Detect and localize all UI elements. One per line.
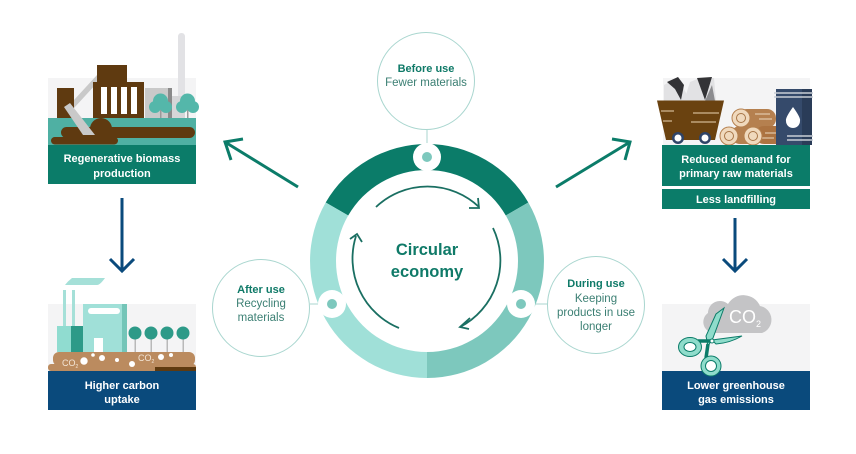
label: Higher carbon: [85, 380, 160, 392]
label: Less landfilling: [696, 194, 776, 206]
icon: scissors: [678, 308, 742, 376]
icon: chimney: [178, 33, 185, 118]
center title: economy: [391, 263, 464, 281]
callout: after use: Recycling: [236, 298, 286, 310]
label: production: [93, 168, 151, 180]
arrow: circular economy to biomass: [225, 139, 298, 187]
callout: before use: [378, 32, 474, 130]
icon: CO2 cloud: 2: [756, 319, 761, 329]
icon: trees: [149, 94, 199, 119]
icon: soil with carbon: 2: [152, 359, 154, 365]
panel: lower greenhouse gas emissions: [662, 295, 810, 410]
label: Regenerative biomass: [64, 153, 180, 165]
chart: circular economy ring: [310, 130, 548, 378]
panel: regenerative biomass production: [48, 33, 199, 184]
label: Reduced demand for: [681, 154, 791, 166]
callout: before use: Before use: [398, 63, 454, 75]
callout: after use: materials: [238, 312, 285, 324]
callout: during use: products in use: [557, 307, 635, 319]
callout: during use: During use: [567, 278, 625, 290]
callout: after use: [212, 260, 310, 356]
callout: during use: Keeping: [575, 293, 617, 305]
arrow: circular economy to raw materials: [556, 139, 630, 187]
icon: factory: [57, 278, 127, 352]
icon: soil with carbon: 2: [76, 364, 78, 370]
icon: soil with carbon: CO: [138, 353, 152, 363]
inner cycle arrows: [350, 187, 500, 329]
callout: during use: longer: [580, 321, 612, 333]
icon: CO2 cloud: [703, 295, 771, 333]
label: Lower greenhouse: [687, 380, 785, 392]
panel: higher carbon uptake: [48, 278, 196, 410]
segment: during use: [427, 202, 544, 378]
icon: mine cart with rocks: [657, 77, 724, 144]
icon: row of trees: [128, 326, 190, 352]
label: gas emissions: [698, 394, 774, 406]
connectors: [310, 130, 548, 318]
callout: during use: [548, 256, 644, 354]
panel: reduced demand for primary raw materials: [657, 77, 813, 209]
callout: after use: After use: [237, 284, 285, 296]
icon: logs: [720, 109, 788, 145]
arrow: raw materials to greenhouse gas: [723, 218, 747, 271]
icon: biomass plant: [57, 65, 185, 118]
icon: biomass mound: [51, 103, 195, 144]
callout: before use: Fewer materials: [385, 77, 467, 89]
label: uptake: [104, 394, 140, 406]
icon: soil with carbon: CO: [62, 358, 76, 368]
center title: Circular: [396, 241, 459, 259]
icon: CO2 cloud: CO: [729, 307, 756, 327]
icon: oil barrel: [774, 89, 813, 145]
segment: before use: [326, 144, 528, 216]
segment: after use: [310, 202, 427, 378]
arrow: biomass to carbon uptake: [110, 198, 134, 271]
label: primary raw materials: [679, 168, 793, 180]
icon: soil with carbon: [48, 352, 196, 371]
